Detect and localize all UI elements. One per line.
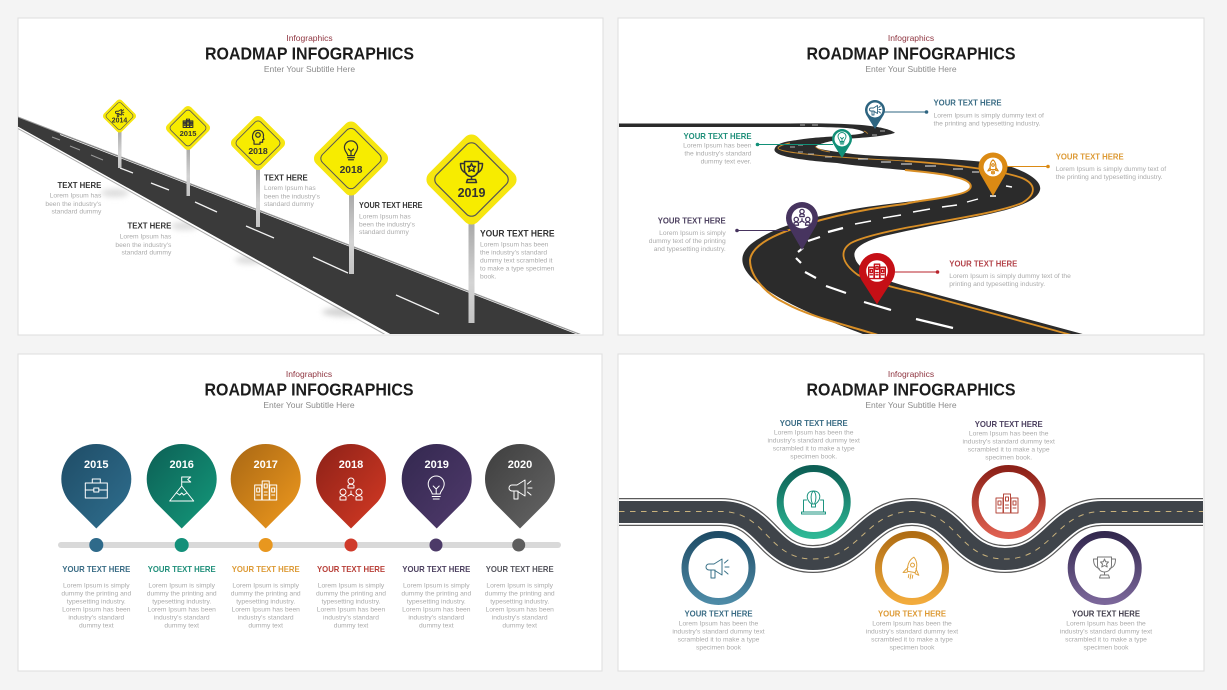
text: column 2017: industry's standard [238, 614, 294, 621]
connector: purple [735, 229, 788, 232]
text: trophy note: YOUR TEXT HERE [1072, 610, 1140, 618]
ring: rocket [878, 534, 946, 602]
text: large 2018 sign note: YOUR TEXT HERE [359, 201, 422, 210]
text: purple callout: dummy text of the printing [649, 238, 726, 245]
title block: panel 2: Enter Your Subtitle Here [865, 64, 957, 74]
title block: panel 2 [806, 33, 1016, 74]
text: orange callout: the printing and typesetting industry. [1056, 174, 1163, 181]
text: trophy note [1060, 610, 1152, 652]
winding road [619, 123, 1090, 336]
text: megaphone note [672, 610, 765, 652]
title block: panel 1: Enter Your Subtitle Here [264, 64, 355, 74]
wavy road [619, 512, 1203, 559]
text: teal callout: Lorem Ipsum has been [683, 143, 752, 150]
pin: rocket [978, 152, 1008, 196]
text: column 2015: dummy the printing and [61, 591, 132, 598]
text: 2015 sign note: TEXT HERE [128, 222, 171, 230]
text: column 2020: YOUR TEXT HERE [486, 565, 554, 574]
pin: 2017: 2017 [253, 459, 278, 471]
text: orange callout: Lorem Ipsum is simply dummy text of [1056, 166, 1166, 173]
text: column 2019: Lorem Ipsum has been [402, 607, 471, 614]
text: buildings note: industry's standard dummy text [963, 439, 1055, 446]
text: teal callout: YOUR TEXT HERE [684, 132, 752, 141]
text: trophy note: industry's standard dummy text [1060, 629, 1152, 636]
text: column 2017: Lorem Ipsum has been [231, 607, 300, 614]
ring: buildings [975, 468, 1042, 536]
text: rocket note [866, 610, 958, 652]
text: rocket note: specimen book [890, 645, 935, 652]
text: blue callout: Lorem Ipsum is simply dummy text of [934, 112, 1044, 119]
text: 2019 sign note: dummy text scrambled it [480, 257, 553, 264]
sign: 2015: 2015 [180, 129, 196, 138]
sign: 2014 [102, 98, 137, 168]
title block: panel 1 [205, 33, 414, 74]
text: blue callout: the printing and typesetting industry. [934, 120, 1041, 127]
sign: 2018 large: 2018 [340, 165, 363, 176]
text: column 2017: dummy the printing and [231, 591, 301, 598]
title block: panel 3: Infographics [286, 369, 332, 379]
text: trophy note: specimen book [1084, 645, 1129, 652]
text: blue callout [934, 98, 1044, 127]
ring: megaphone [685, 534, 752, 602]
text: column 2017: YOUR TEXT HERE [232, 565, 300, 574]
text: orange callout: YOUR TEXT HERE [1056, 152, 1124, 161]
text: large 2018 sign note: Lorem Ipsum has [359, 213, 411, 220]
panel: wavy road with rings [618, 354, 1204, 671]
text: column 2020: Lorem Ipsum has been [485, 607, 554, 614]
text: rocket note: YOUR TEXT HERE [878, 610, 946, 618]
text: buildings note: specimen book. [985, 455, 1032, 462]
text: purple callout [649, 216, 726, 253]
text: purple callout: YOUR TEXT HERE [658, 216, 726, 225]
text: column 2017: typesetting industry. [236, 598, 295, 605]
text: column 2019: industry's standard [408, 614, 465, 621]
title block: panel 4: Enter Your Subtitle Here [865, 400, 957, 410]
text: balloon note: scrambled it to make a type [773, 446, 855, 453]
text: column 2016 [147, 565, 217, 629]
text: megaphone note: scrambled it to make a type [678, 637, 760, 644]
text: column 2018: Lorem Ipsum is simply [318, 583, 385, 590]
text: column 2018: typesetting industry. [322, 598, 381, 605]
text: teal callout [683, 132, 752, 165]
text: 2019 sign note: Lorem Ipsum has been [480, 242, 549, 249]
pin: 2018 [316, 444, 386, 528]
title block: panel 4: ROADMAP INFOGRAPHICS [806, 380, 1016, 400]
pin: 2016: 2016 [169, 459, 194, 471]
text: column 2019: typesetting industry. [407, 598, 466, 605]
text: column 2020: Lorem Ipsum is simply [486, 583, 554, 590]
text: 2014 sign note [45, 181, 102, 216]
text: large 2018 sign note: been the industry's [359, 221, 416, 228]
text: megaphone note: specimen book [696, 645, 742, 652]
text: column 2016: dummy text [164, 622, 199, 629]
text: column 2015: dummy text [79, 622, 114, 629]
text: 2015 sign note: been the industry's [115, 242, 172, 249]
text: 2019 sign note: book. [480, 273, 497, 280]
text: column 2018: Lorem Ipsum has been [317, 607, 385, 614]
pin: 2015 [61, 444, 131, 528]
text: trophy note: scrambled it to make a type [1065, 637, 1147, 644]
panel: location pin timeline [18, 354, 602, 671]
sign: 2018 small: 2018 [248, 146, 268, 156]
text: blue callout: YOUR TEXT HERE [934, 98, 1002, 108]
ring: trophy [1071, 534, 1138, 602]
text: megaphone note: Lorem Ipsum has been the [679, 621, 759, 628]
text: megaphone note: YOUR TEXT HERE [684, 610, 753, 618]
text: teal callout: dummy text ever. [701, 158, 752, 165]
text: column 2015: Lorem Ipsum is simply [63, 583, 130, 590]
sign: 2018 large [311, 118, 391, 274]
text: balloon note [768, 419, 860, 461]
pin: people [786, 202, 818, 250]
text: 2019 sign note [480, 229, 555, 280]
text: column 2016: Lorem Ipsum is simply [148, 583, 216, 590]
pin: light bulb [832, 129, 852, 158]
text: column 2016: dummy the printing and [147, 591, 217, 598]
text: rocket note: Lorem Ipsum has been the [872, 621, 952, 628]
text: balloon note: industry's standard dummy text [768, 438, 860, 445]
title block: panel 3: ROADMAP INFOGRAPHICS [204, 380, 414, 400]
sign: 2018 small [229, 114, 287, 227]
text: column 2020: industry's standard [492, 614, 548, 621]
text: column 2015: industry's standard [68, 614, 125, 621]
text: column 2016: typesetting industry. [152, 598, 211, 605]
text: column 2018: dummy the printing and [316, 591, 386, 598]
text: megaphone note: industry's standard dummy text [672, 629, 765, 636]
pin: 2019 [402, 444, 472, 528]
panel: highway signs roadmap [18, 18, 603, 336]
text: column 2016: industry's standard [154, 614, 210, 621]
text: small 2018 sign note [264, 174, 321, 208]
straight perspective road [18, 117, 582, 336]
timeline dots [89, 538, 525, 552]
title block: panel 3 [204, 369, 414, 410]
connector: red [895, 270, 939, 274]
text: buildings note: scrambled it to make a type [968, 447, 1050, 454]
text: buildings note [963, 420, 1055, 462]
text: column 2017: dummy text [248, 622, 283, 629]
text: small 2018 sign note: standard dummy [264, 201, 314, 208]
text: column 2020: dummy text [502, 622, 537, 629]
text: trophy note: Lorem Ipsum has been the [1066, 621, 1146, 628]
ring: balloon [780, 468, 847, 536]
timeline bar [58, 542, 561, 548]
pin: 2020: 2020 [508, 459, 532, 471]
text: column 2018 [316, 565, 386, 629]
text: 2014 sign note: TEXT HERE [58, 181, 101, 190]
text: rocket note: industry's standard dummy text [866, 629, 958, 636]
text: column 2018: dummy text [334, 622, 368, 629]
text: red callout: YOUR TEXT HERE [949, 260, 1018, 269]
pin: 2017 [231, 444, 301, 528]
text: column 2020: dummy the printing and [485, 591, 555, 598]
text: 2019 sign note: the industry's standard [480, 250, 547, 257]
text: small 2018 sign note: TEXT HERE [264, 174, 308, 183]
sign: 2015 [164, 104, 212, 196]
text: column 2019: Lorem Ipsum is simply [403, 583, 470, 590]
panel: winding road roadmap [618, 18, 1204, 336]
connector: blue [884, 110, 928, 114]
text: column 2016: YOUR TEXT HERE [148, 565, 216, 574]
title block: panel 4: Infographics [888, 369, 934, 379]
text: 2015 sign note [115, 222, 172, 257]
text: column 2015: YOUR TEXT HERE [62, 565, 131, 574]
text: purple callout: Lorem Ipsum is simply [659, 230, 726, 237]
connector: orange [1007, 165, 1050, 168]
text: 2015 sign note: standard dummy [121, 250, 172, 257]
text: 2014 sign note: Lorem Ipsum has [50, 193, 102, 200]
text: 2019 sign note: YOUR TEXT HERE [480, 229, 554, 239]
connector: teal [756, 143, 833, 146]
text: column 2015: Lorem Ipsum has been [62, 607, 131, 614]
text: red callout: printing and typesetting industry. [949, 281, 1045, 288]
text: column 2018: YOUR TEXT HERE [317, 565, 385, 574]
title block: panel 1: Infographics [286, 33, 333, 43]
pin: 2016 [147, 444, 217, 528]
text: teal callout: the industry's standard [684, 151, 752, 158]
pin: 2015: 2015 [84, 459, 109, 471]
pin: 2019: 2019 [424, 459, 449, 471]
text: orange callout [1056, 152, 1166, 181]
pin: buildings [859, 253, 895, 304]
text: red callout [949, 260, 1071, 288]
text: column 2020 [485, 565, 555, 629]
title block: panel 2: ROADMAP INFOGRAPHICS [806, 44, 1016, 64]
pin: 2020 [485, 444, 555, 528]
pin: megaphone [865, 100, 885, 129]
title block: panel 2: Infographics [888, 33, 934, 43]
title block: panel 4 [806, 369, 1016, 410]
text: column 2017 [231, 565, 301, 629]
text: 2019 sign note: to make a type specimen [480, 265, 555, 272]
text: 2014 sign note: been the industry's [45, 201, 102, 208]
text: small 2018 sign note: been the industry's [264, 193, 321, 200]
text: balloon note: specimen book. [790, 454, 837, 461]
pin: 2018: 2018 [339, 459, 363, 471]
text: balloon note: Lorem Ipsum has been the [774, 430, 854, 437]
text: 2014 sign note: standard dummy [51, 209, 102, 216]
title block: panel 3: Enter Your Subtitle Here [263, 400, 355, 410]
text: 2015 sign note: Lorem Ipsum has [120, 234, 172, 241]
text: column 2018: industry's standard [323, 614, 379, 621]
text: column 2015 [61, 565, 132, 629]
text: column 2019: YOUR TEXT HERE [402, 565, 471, 574]
title block: panel 1: ROADMAP INFOGRAPHICS [205, 44, 414, 64]
sign: 2014: 2014 [112, 118, 127, 125]
text: buildings note: YOUR TEXT HERE [975, 420, 1043, 429]
text: column 2019: dummy the printing and [401, 591, 472, 598]
text: column 2017: Lorem Ipsum is simply [232, 583, 300, 590]
text: buildings note: Lorem Ipsum has been the [969, 431, 1049, 438]
text: purple callout: and typesetting industry. [654, 246, 726, 253]
text: red callout: Lorem Ipsum is simply dummy text of the [949, 273, 1071, 280]
text: rocket note: scrambled it to make a type [871, 637, 953, 644]
sign: 2019 [423, 131, 520, 323]
text: small 2018 sign note: Lorem Ipsum has [264, 185, 316, 192]
text: balloon note: YOUR TEXT HERE [780, 419, 848, 428]
text: column 2015: typesetting industry. [67, 598, 126, 605]
text: column 2019 [401, 565, 472, 629]
sign: 2019: 2019 [458, 186, 485, 200]
text: large 2018 sign note: standard dummy [359, 229, 409, 236]
text: column 2016: Lorem Ipsum has been [147, 607, 216, 614]
text: column 2020: typesetting industry. [490, 598, 549, 605]
text: column 2019: dummy text [419, 622, 454, 629]
text: large 2018 sign note [359, 201, 422, 236]
